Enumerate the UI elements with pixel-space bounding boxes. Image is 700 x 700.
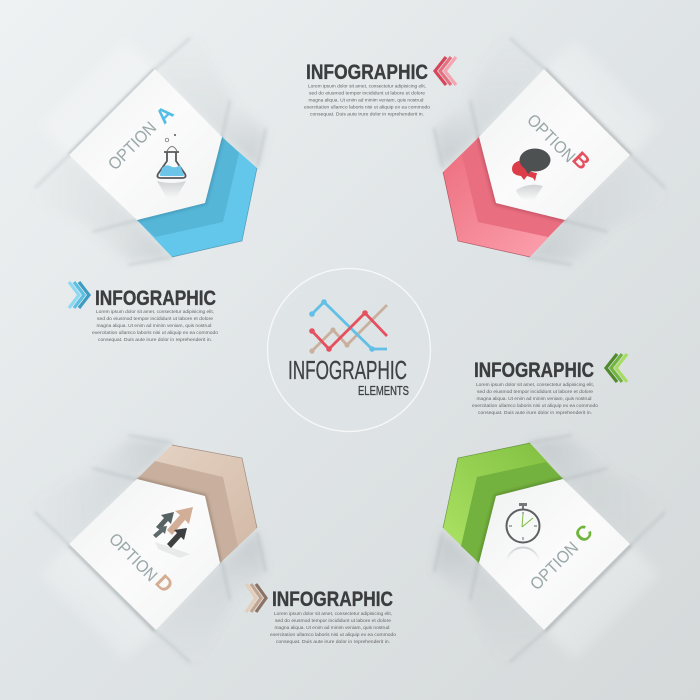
label: option C: C — [571, 521, 597, 547]
icon: speech bubbles — [512, 148, 550, 200]
icon: blue chevrons — [69, 282, 89, 308]
text block: top: consequat. Duis aute irure dolor in reprehenderit in. — [310, 112, 424, 116]
center title: INFOGRAPHIC — [288, 355, 407, 385]
text block: bottom — [270, 588, 396, 644]
text block: bottom: INFOGRAPHIC — [272, 588, 393, 611]
text block: right: magna aliqua. Ut enim ad minim veniam, quis nostrud — [476, 396, 592, 401]
label: option A — [104, 102, 178, 174]
text block: left: exercitation ullamco laboris nisi ut aliquip ex ea commodo — [92, 330, 218, 335]
white card — [69, 479, 220, 630]
text block: top: INFOGRAPHIC — [306, 61, 428, 84]
blue chevron band — [137, 137, 257, 257]
text block: top — [304, 61, 430, 116]
icon: red chevrons — [435, 57, 456, 85]
icon: green chevrons — [606, 354, 627, 382]
text block: bottom: magna aliqua. Ut enim ad minim veniam, quis nostrud — [274, 625, 390, 630]
label: option A: A — [152, 102, 178, 128]
text block: left: sed do eiusmod tempor incididunt ut labore et dolore — [97, 316, 213, 321]
text block: right: consequat. Duis aute irure dolor in reprehenderit in. — [478, 410, 592, 415]
white card — [69, 69, 222, 220]
label: option B: OPTION — [523, 110, 579, 166]
panel: option C — [443, 443, 630, 630]
text block: bottom: Lorem ipsum dolor sit amet, consectetur adipisicing elit, — [274, 611, 392, 616]
label: option B: B — [568, 148, 594, 174]
text block: left: INFOGRAPHIC — [95, 287, 216, 310]
text block: left: Lorem ipsum dolor sit amet, consectetur adipisicing elit, — [96, 309, 214, 314]
text block: left: consequat. Duis aute irure dolor in reprehenderit in. — [98, 337, 212, 342]
label: option C: OPTION — [526, 538, 582, 594]
text block: top: magna aliqua. Ut enim ad minim veniam, quis nostrud — [308, 98, 424, 102]
label: option C — [526, 521, 597, 594]
text block: right: Lorem ipsum dolor sit amet, consectetur adipisicing elit, — [476, 382, 594, 387]
text block: right: exercitation ullamco laboris nisi ut aliquip ex ea commodo — [472, 403, 598, 408]
label: option D: D — [151, 571, 177, 597]
center subtitle: ELEMENTS — [358, 384, 409, 398]
center circle — [268, 268, 430, 432]
tan chevron band — [137, 445, 257, 563]
white card — [479, 479, 630, 630]
white card — [479, 69, 630, 220]
label: option A: OPTION — [104, 118, 160, 174]
text block: right: sed do eiusmod tempor incididunt ut labore et dolore — [477, 389, 593, 394]
text block: bottom: consequat. Duis aute irure dolor in reprehenderit in. — [276, 639, 390, 644]
text block: bottom: exercitation ullamco laboris nisi ut aliquip ex ea commodo — [270, 632, 396, 637]
line chart icon — [309, 299, 387, 354]
icon: arrows — [153, 507, 193, 558]
text block: top: Lorem ipsum dolor sit amet, consectetur adipisicing elit, — [308, 84, 426, 88]
text block: right — [472, 359, 598, 415]
text block: top: sed do eiusmod tempor incididunt ut labore et dolore — [309, 90, 425, 96]
text block: left: magna aliqua. Ut enim ad minim veniam, quis nostrud — [96, 323, 212, 328]
text block: top: exercitation ullamco laboris nisi ut aliquip ex ea commodo — [304, 104, 430, 110]
icon: brown chevrons — [246, 584, 266, 612]
panel: option D — [69, 445, 257, 630]
icon: flask — [157, 134, 186, 198]
green chevron band — [443, 443, 563, 563]
text block: bottom: sed do eiusmod tempor incididunt ut labore et dolore — [275, 618, 391, 623]
label: option D: OPTION — [105, 529, 161, 585]
icon: stopwatch — [506, 503, 540, 560]
panel: option B — [443, 69, 630, 257]
text block: right: INFOGRAPHIC — [474, 359, 594, 382]
pink chevron band — [443, 137, 565, 257]
panel: option A — [69, 69, 257, 257]
text block: left — [92, 287, 218, 342]
